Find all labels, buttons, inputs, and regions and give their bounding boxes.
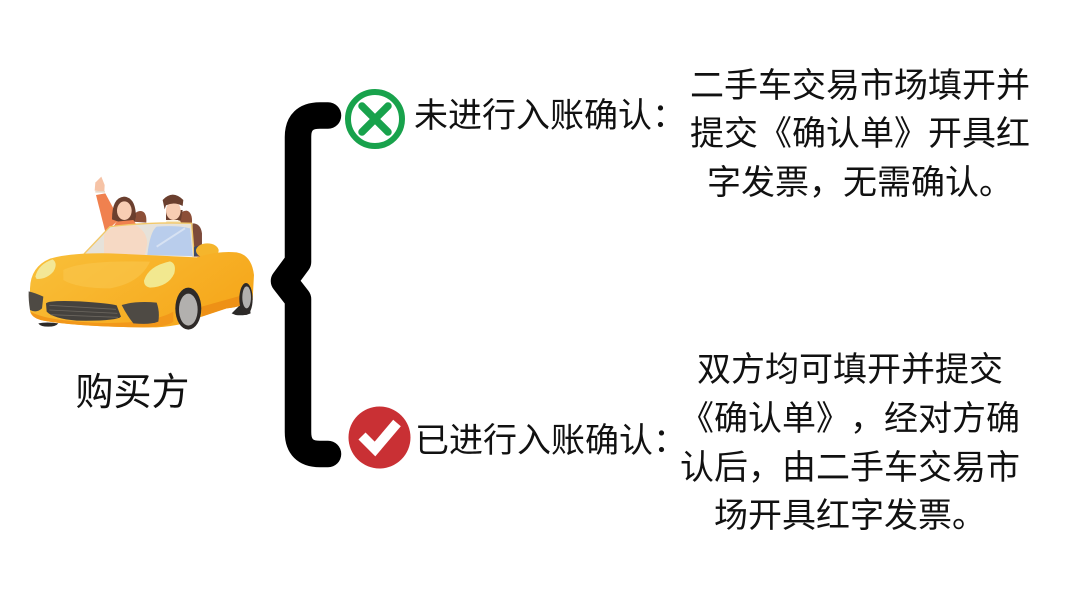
label: not confirmed: 未进行入账确认： [414,97,686,135]
text block: not confirmed procedure: 提交《确认单》开具红 [690,115,1030,153]
text block: confirmed procedure: 场开具红字发票。 [714,497,986,535]
text block: not confirmed procedure: 二手车交易市场填开并 [690,67,1030,105]
text block: confirmed procedure: 双方均可填开并提交 [697,351,1003,389]
text block: not confirmed procedure [690,67,1030,202]
label: buyer: 购买方 [75,372,190,414]
text block: not confirmed procedure: 字发票，无需确认。 [707,164,1013,202]
text block: confirmed procedure [680,351,1020,535]
label: confirmed: 已进行入账确认： [415,422,687,460]
text block: confirmed procedure: 认后，由二手车交易市 [680,449,1020,487]
text block: confirmed procedure: 《确认单》，经对方确 [680,400,1020,438]
